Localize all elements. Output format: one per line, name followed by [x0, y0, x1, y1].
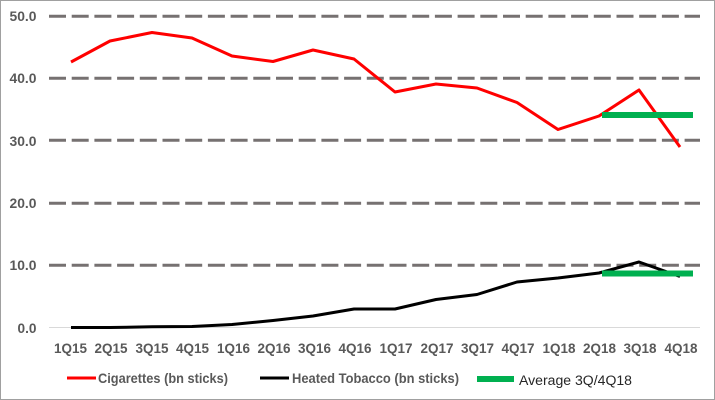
- heated tobacco line: [71, 262, 680, 328]
- x axis labels: 1Q17: [380, 341, 412, 356]
- average line: cigarettes: [602, 112, 693, 118]
- x axis labels: [54, 341, 698, 356]
- average line: heated tobacco: [602, 270, 693, 276]
- x axis labels: 3Q17: [461, 341, 494, 356]
- x axis labels: 1Q18: [542, 341, 576, 356]
- y axis labels: 40.0: [10, 71, 36, 86]
- y axis labels: 0.0: [18, 321, 36, 336]
- x axis labels: 1Q16: [217, 341, 250, 356]
- x axis labels: 4Q15: [176, 341, 209, 356]
- y axis labels: 20.0: [10, 196, 36, 211]
- x axis labels: 2Q15: [94, 341, 128, 356]
- x axis labels: 3Q18: [624, 341, 657, 356]
- x axis labels: 3Q15: [136, 341, 169, 356]
- x axis labels: 2Q18: [583, 341, 616, 356]
- y axis labels: 50.0: [10, 9, 36, 24]
- y axis labels: 10.0: [10, 258, 36, 273]
- x axis labels: 2Q17: [420, 341, 454, 356]
- x axis labels: 2Q16: [258, 341, 291, 356]
- legend: heated tobacco: Heated Tobacco (bn sticks): [292, 371, 459, 386]
- legend: average: Average 3Q/4Q18: [519, 373, 632, 388]
- x axis labels: 4Q18: [664, 341, 698, 356]
- x axis labels: 3Q16: [298, 341, 331, 356]
- x axis labels: 4Q17: [502, 341, 534, 356]
- legend: cigarettes: Cigarettes (bn sticks): [98, 371, 228, 386]
- cigarettes line: [71, 32, 680, 147]
- x axis labels: 1Q15: [54, 341, 87, 356]
- y axis labels: 30.0: [10, 134, 36, 149]
- x axis labels: 4Q16: [338, 341, 372, 356]
- y axis labels: [10, 9, 36, 336]
